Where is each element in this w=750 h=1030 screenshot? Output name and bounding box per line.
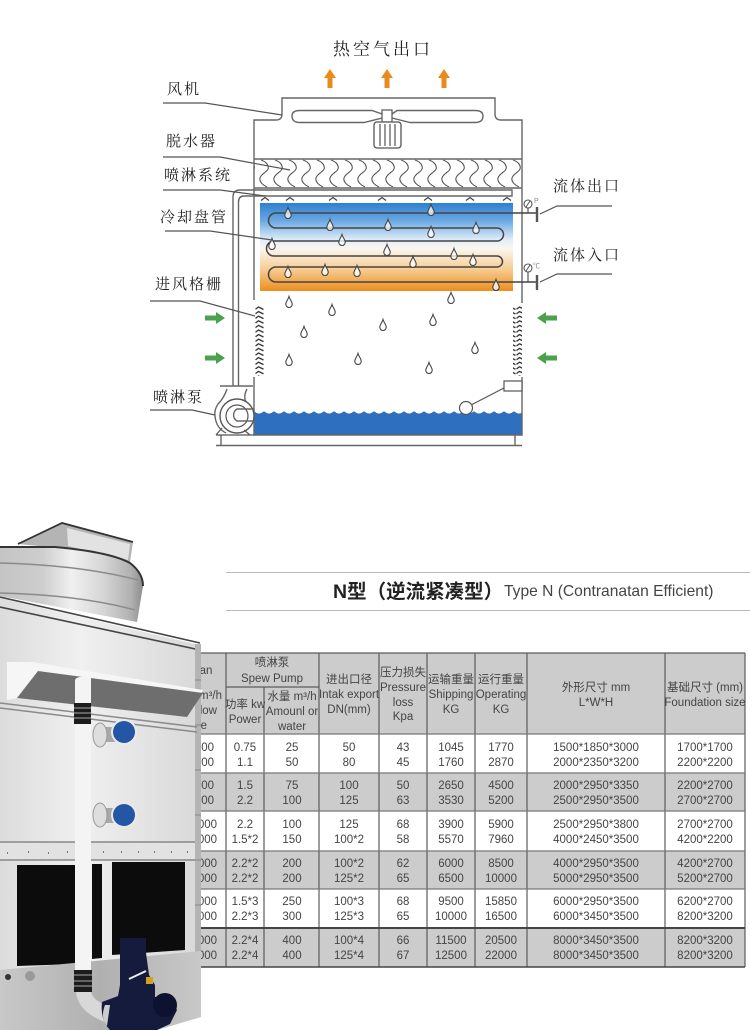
table row 1: 25: [286, 742, 298, 754]
table row 3: 4000*2450*3500: [553, 834, 639, 846]
table header text: 功率 kw: [225, 697, 266, 711]
table header text: 喷淋泵: [255, 656, 290, 669]
upper blue valve: [93, 719, 137, 747]
white riser pipe: [74, 676, 108, 1022]
table row 6: 400: [282, 935, 302, 947]
label: fan: [163, 81, 282, 115]
table row 3: 000: [198, 819, 217, 831]
serpentine coil tubes: [267, 213, 537, 282]
table row 5: 6000*3450*3500: [553, 911, 639, 923]
table row 4: 125*2: [334, 873, 364, 885]
table header text: 水量 m³/h: [267, 690, 317, 703]
table row 6: 20500: [485, 935, 517, 947]
spray pump: [215, 386, 254, 435]
table header text: 运行重量: [478, 672, 524, 686]
label: fan: 风机: [167, 81, 201, 98]
white mask behind tower edge: [0, 596, 201, 1030]
table row 2: 75: [286, 780, 298, 792]
table row 4: 2.2*2: [232, 873, 258, 885]
table row 5: 6200*2700: [677, 896, 733, 908]
table header text: L*W*H: [579, 697, 613, 709]
table row 1: 2200*2200: [677, 757, 733, 769]
table row 4: 6000: [438, 858, 464, 870]
table row 5: 125*3: [334, 911, 364, 923]
table header text: 基础尺寸 (mm): [667, 680, 743, 694]
table header text: m³/h: [199, 690, 222, 702]
spray system pipes and nozzles: [233, 190, 512, 386]
table row 2: 2000*2950*3350: [553, 780, 639, 792]
label: spray system: [163, 166, 265, 196]
table row 1: 1770: [488, 742, 514, 754]
icon: orange hot air arrows: [324, 69, 450, 88]
table header text: 运输重量: [428, 672, 474, 686]
table row 2: 2500*2950*3500: [553, 795, 639, 807]
table row 1: 1500*1850*3000: [553, 742, 639, 754]
table row 6: 400: [282, 950, 302, 962]
tower casing: [254, 98, 522, 303]
table row 1: 1045: [438, 742, 464, 754]
table row 6: 11500: [435, 935, 467, 947]
table row 4: 200: [282, 873, 302, 885]
float valve: [460, 381, 522, 414]
upper body edge: [0, 597, 200, 650]
table row 5: [198, 896, 733, 923]
tower fan hood: [18, 523, 133, 562]
label: spray system: 喷淋系统: [164, 166, 232, 184]
fan with blades and motor: [292, 110, 483, 148]
table row 6: 8000*3450*3500: [553, 935, 639, 947]
table row 5: 8200*3200: [677, 911, 733, 923]
tower main body: [0, 598, 201, 1030]
table row 5: 300: [282, 911, 302, 923]
table row 5: 65: [397, 911, 409, 923]
table row 2: 50: [397, 780, 409, 792]
table row 1: 50: [343, 742, 355, 754]
water drops in coil and fill: [269, 204, 499, 374]
table row 4: 2.2*2: [232, 858, 258, 870]
table row 1: 00: [201, 757, 214, 769]
table row 2: 63: [397, 795, 409, 807]
table row 6: 2.2*4: [232, 950, 259, 962]
table row 1: 43: [397, 742, 409, 754]
table header text: Amounl or: [266, 706, 318, 718]
navy spray pump: [102, 938, 177, 1030]
table row 6: 100*4: [334, 935, 365, 947]
table row 3: 7960: [488, 834, 514, 846]
table row 3: 150: [282, 834, 302, 846]
table row 6: 66: [397, 935, 409, 947]
table row 2: 00: [201, 795, 214, 807]
middle band: [0, 842, 195, 860]
table header text: Shipping: [429, 689, 473, 701]
table row 2: 100: [339, 780, 359, 792]
table row 2: 2200*2700: [677, 780, 733, 792]
table row backgrounds: [190, 653, 745, 967]
label: cooling coil: [160, 209, 272, 240]
label: spray pump: [150, 388, 215, 415]
table grid: [190, 653, 745, 967]
label: spray pump: 喷淋泵: [153, 388, 204, 406]
label: fluid outlet: 流体出口: [553, 178, 621, 195]
table header text: water: [277, 721, 306, 733]
label: fluid inlet: 流体入口: [553, 247, 621, 264]
table row 1: 2000*2350*3200: [553, 757, 639, 769]
table row 4: 65: [397, 873, 409, 885]
table row 4: 5200*2700: [677, 873, 733, 885]
table row 3: 2700*2700: [677, 819, 733, 831]
table row 2: 100: [282, 795, 302, 807]
table row 5: 16500: [485, 911, 517, 923]
table header text: e: [201, 720, 207, 732]
table row 5: 68: [397, 896, 409, 908]
table row 6: 67: [397, 950, 409, 962]
table row 2: [201, 780, 733, 807]
table row 3: 4200*2200: [677, 834, 733, 846]
table row 6: 000: [198, 935, 217, 947]
table header text: loss: [393, 697, 413, 709]
table row 4: 62: [397, 858, 409, 870]
table row 1: 0.75: [234, 742, 256, 754]
table row 2: 1.5: [237, 780, 253, 792]
table row 3: [198, 819, 733, 846]
table header text: KG: [443, 704, 459, 716]
table row 6: 125*4: [334, 950, 365, 962]
dark louvre windows: [17, 862, 185, 966]
table header text: 压力损失: [380, 665, 426, 679]
table header text: 外形尺寸 mm: [562, 680, 630, 694]
table row 1: 1.1: [237, 757, 253, 769]
table header text: Intak export: [319, 689, 380, 701]
table row 3: 58: [397, 834, 409, 846]
label: drift eliminator: 脱水器: [166, 133, 217, 150]
table header text: Foundation size: [664, 697, 746, 709]
table header text: an: [200, 665, 212, 677]
table row 4: 4000*2950*3500: [553, 858, 639, 870]
table row 2: 2.2: [237, 795, 253, 807]
outlet and inlet gauges with flanges: [524, 198, 540, 290]
table row 2: 3530: [438, 795, 464, 807]
diagram: cooling tower schematic: [150, 40, 621, 446]
air inlet louvres: [255, 306, 522, 376]
table row 3: 68: [397, 819, 409, 831]
table row 1: 1700*1700: [677, 742, 733, 754]
table header text: KG: [493, 704, 509, 716]
table row 5: 000: [198, 911, 217, 923]
table row 5: 2.2*3: [232, 911, 258, 923]
table row 4: 4200*2700: [677, 858, 733, 870]
table row 5: 100*3: [334, 896, 364, 908]
table row 4: [198, 858, 733, 885]
table header text: low: [200, 705, 218, 717]
drift eliminator: [254, 159, 522, 188]
table row 3: 2.2: [237, 819, 253, 831]
specification table: [190, 653, 746, 967]
label: drift eliminator: [163, 133, 290, 170]
label: fluid outlet: [540, 178, 621, 214]
table row 2: 4500: [488, 780, 514, 792]
table row 4: 200: [282, 858, 302, 870]
table row 3: 000: [198, 834, 217, 846]
table row 3: 100: [282, 819, 302, 831]
heading: Type N: N型（逆流紧凑型）: [333, 580, 503, 603]
table row 4: 000: [198, 873, 217, 885]
table row 1: 45: [397, 757, 409, 769]
table row 4: 5000*2950*3500: [553, 873, 639, 885]
table row 3: 3900: [438, 819, 464, 831]
table row 1: 2870: [488, 757, 514, 769]
label: cooling coil: 冷却盘管: [160, 209, 228, 226]
label: air inlet grille: [150, 275, 255, 316]
outlet and inlet gauges with flanges: P: [534, 198, 539, 205]
table row 6: 12500: [435, 950, 467, 962]
air outlet louvre hood: [0, 662, 203, 732]
table row 3: 5900: [488, 819, 514, 831]
table row 3: 5570: [438, 834, 464, 846]
table row 5: 000: [198, 896, 217, 908]
basin water: [254, 412, 522, 435]
table header text: [199, 656, 746, 733]
photo: cooling tower unit: [0, 523, 203, 1030]
table row 3: 2500*2950*3800: [553, 819, 639, 831]
table row 6: 2.2*4: [232, 935, 259, 947]
table row 5: 10000: [435, 911, 467, 923]
table row 2: 2700*2700: [677, 795, 733, 807]
table row 2: 5200: [488, 795, 514, 807]
table row 2: 125: [339, 795, 359, 807]
label: fluid inlet: [540, 247, 621, 282]
body right edge strip: [195, 644, 201, 1017]
lower blue valve: [93, 802, 137, 828]
table header text: 进出口径: [326, 672, 372, 686]
table row 1: 1760: [438, 757, 464, 769]
table row 5: 9500: [438, 896, 464, 908]
label: air inlet grille: 进风格栅: [155, 275, 223, 293]
table row 1: 80: [343, 757, 355, 769]
table row 6: 8000*3450*3500: [553, 950, 639, 962]
table row 1: [201, 742, 733, 769]
table row 4: 100*2: [334, 858, 364, 870]
table header text: Kpa: [393, 711, 414, 723]
table row 2: 2650: [438, 780, 464, 792]
table row 5: 6000*2950*3500: [553, 896, 639, 908]
table row 1: 50: [286, 757, 298, 769]
table row 6: [198, 935, 733, 962]
table row 3: 1.5*2: [232, 834, 258, 846]
table row 6: 000: [198, 950, 217, 962]
table row 5: 250: [282, 896, 302, 908]
table row 4: 6500: [438, 873, 464, 885]
table row 1: 00: [201, 742, 214, 754]
table row 6: 8200*3200: [677, 950, 733, 962]
table row 4: 10000: [485, 873, 517, 885]
table row 4: 000: [198, 858, 217, 870]
table row 5: 1.5*3: [232, 896, 258, 908]
table row 6: 22000: [485, 950, 517, 962]
table header text: Spew Pump: [241, 673, 303, 685]
outlet and inlet gauges with flanges: ℃: [533, 262, 540, 270]
fan stack cylinder: [0, 547, 143, 622]
cooling coil block with gradient: [260, 203, 513, 291]
table header text: Power: [229, 714, 261, 726]
table header text: Operating: [476, 689, 526, 701]
lower basin panel: [0, 951, 201, 1030]
heading: Type N: Type N (Contranatan Efficient): [504, 583, 713, 600]
table header text: DN(mm): [327, 704, 371, 716]
table row 3: 125: [339, 819, 359, 831]
basin walls and base: [216, 377, 522, 446]
table row 5: 15850: [485, 896, 517, 908]
table row 4: 8500: [488, 858, 514, 870]
table header text: Pressure: [380, 682, 426, 694]
table row 3: 100*2: [334, 834, 364, 846]
table row 6: 8200*3200: [677, 935, 733, 947]
title: hot air outlet: 热空气出口: [333, 40, 433, 59]
table row 2: 00: [201, 780, 214, 792]
heading: Type N: [226, 572, 750, 610]
icon: green air inlet arrows: [205, 312, 557, 364]
